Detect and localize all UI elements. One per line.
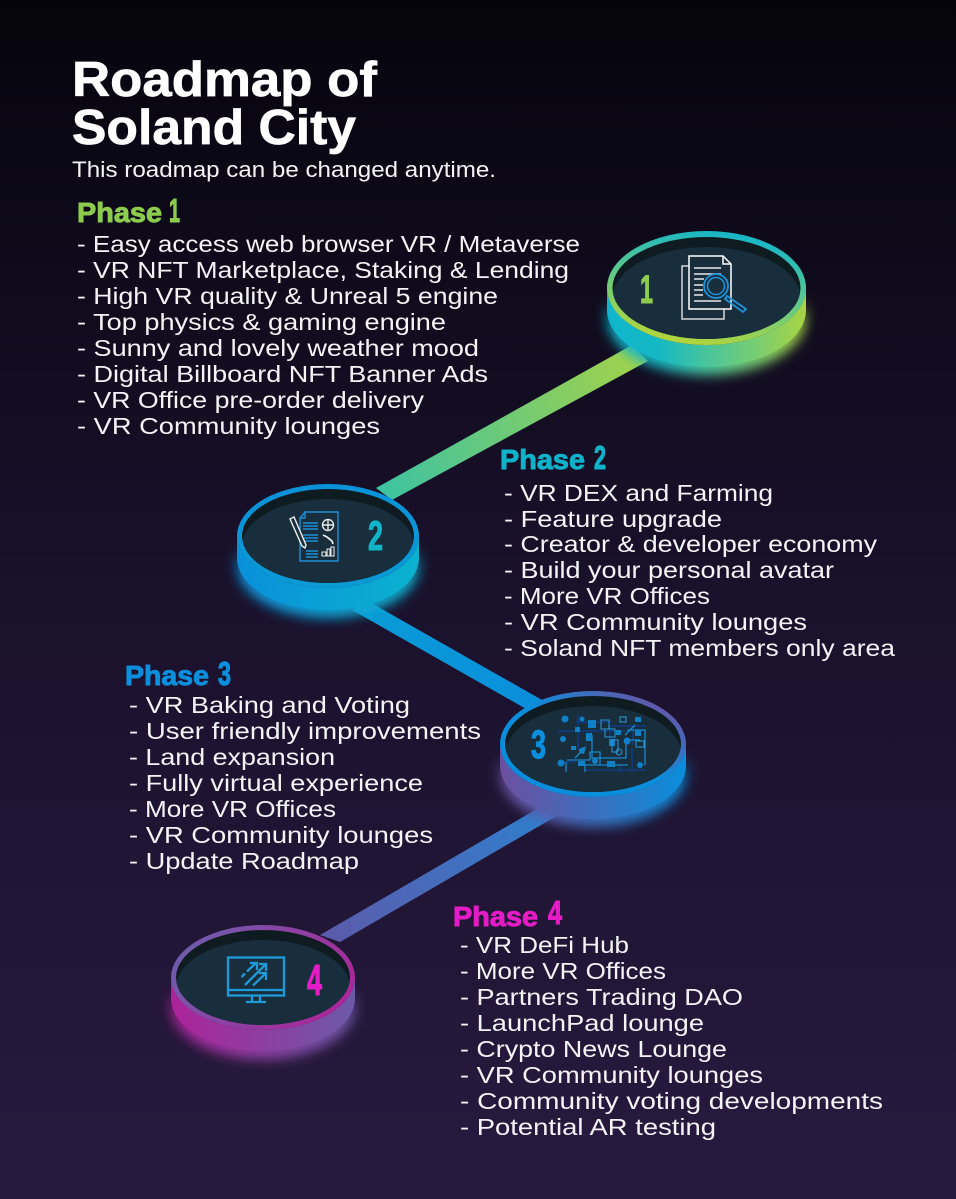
phase 4 heading: Phase	[453, 901, 538, 932]
phase 3 list: - More VR Offices	[129, 796, 336, 822]
phase 4 heading	[453, 894, 562, 932]
icon: document with pencil	[290, 512, 338, 561]
title: Soland City	[72, 101, 356, 155]
phase 3 heading: Phase	[125, 660, 209, 691]
phase 1 list: - VR NFT Marketplace, Staking & Lending	[77, 257, 569, 283]
phase 2 list	[504, 480, 895, 661]
phase 3 list: - VR Community lounges	[129, 822, 433, 848]
phase 1 list: - VR Community lounges	[77, 413, 380, 439]
phase 4 text	[453, 894, 883, 1140]
icon: app network	[558, 715, 646, 773]
connector: disk 2 to disk 3	[352, 600, 542, 710]
phase 4 list: - Potential AR testing	[460, 1114, 716, 1140]
icon: monitor with arrows	[228, 958, 284, 1002]
phase 3 list: - VR Baking and Voting	[129, 692, 410, 718]
phase 1 list: - VR Office pre-order delivery	[77, 387, 425, 413]
phase 1 list: - Easy access web browser VR / Metaverse	[77, 231, 580, 257]
phase 4 list: - More VR Offices	[460, 958, 666, 984]
phase 4 list: - Partners Trading DAO	[460, 984, 743, 1010]
phase 2 list: - Build your personal avatar	[504, 557, 834, 583]
phase 1 heading: 1	[169, 192, 180, 229]
phase 3 list: - Fully virtual experience	[129, 770, 423, 796]
disk 4	[171, 925, 355, 1060]
connector: disk 3 to disk 4	[320, 806, 560, 942]
title: Roadmap of	[72, 53, 378, 107]
title	[72, 53, 378, 155]
phase 3 list: - Update Roadmap	[129, 848, 359, 874]
phase 2 list: - Soland NFT members only area	[504, 635, 895, 661]
number 3: 3	[531, 723, 546, 767]
disk 2	[237, 484, 419, 618]
phase 4 list: - Crypto News Lounge	[460, 1036, 727, 1062]
phase 4 list: - VR Community lounges	[460, 1062, 763, 1088]
number 1: 1	[640, 268, 653, 312]
phase 1 list: - Top physics & gaming engine	[77, 309, 446, 335]
phase 2 heading: 2	[594, 439, 606, 476]
phase 2 text	[500, 439, 895, 661]
phase 2 list: - VR Community lounges	[504, 609, 807, 635]
disk 3	[500, 691, 686, 827]
phase 1 heading	[77, 192, 180, 229]
icon: document with magnifier	[682, 256, 746, 319]
phase 2 heading: Phase	[500, 444, 585, 475]
phase 3 text	[125, 655, 481, 874]
phase 2 list: - Feature upgrade	[504, 506, 722, 532]
phase 3 list	[129, 692, 481, 874]
phase 1 list: - Sunny and lovely weather mood	[77, 335, 479, 361]
disk 1	[607, 231, 806, 375]
number 2: 2	[368, 512, 383, 559]
phase 2 list: - VR DEX and Farming	[504, 480, 773, 506]
phase 2 heading	[500, 439, 606, 476]
phase 3 heading	[125, 655, 231, 692]
phase 1 heading: Phase	[77, 197, 162, 228]
phase 4 list: - LaunchPad lounge	[460, 1010, 704, 1036]
subtitle: This roadmap can be changed anytime.	[72, 157, 496, 182]
phase 1 list	[77, 231, 580, 439]
phase 1 list: - High VR quality & Unreal 5 engine	[77, 283, 498, 309]
phase 4 heading: 4	[548, 894, 562, 931]
phase 4 list: - VR DeFi Hub	[460, 932, 629, 958]
phase 3 list: - User friendly improvements	[129, 718, 481, 744]
phase 1 list: - Digital Billboard NFT Banner Ads	[77, 361, 488, 387]
connector: disk 1 to disk 2	[376, 345, 648, 500]
phase 2 list: - More VR Offices	[504, 583, 710, 609]
phase 3 heading: 3	[218, 655, 231, 692]
phase 4 list	[460, 932, 883, 1140]
phase 2 list: - Creator & developer economy	[504, 531, 878, 557]
number 4: 4	[307, 956, 322, 1005]
phase 1 text	[77, 192, 580, 439]
phase 3 list: - Land expansion	[129, 744, 335, 770]
phase 4 list: - Community voting developments	[460, 1088, 883, 1114]
